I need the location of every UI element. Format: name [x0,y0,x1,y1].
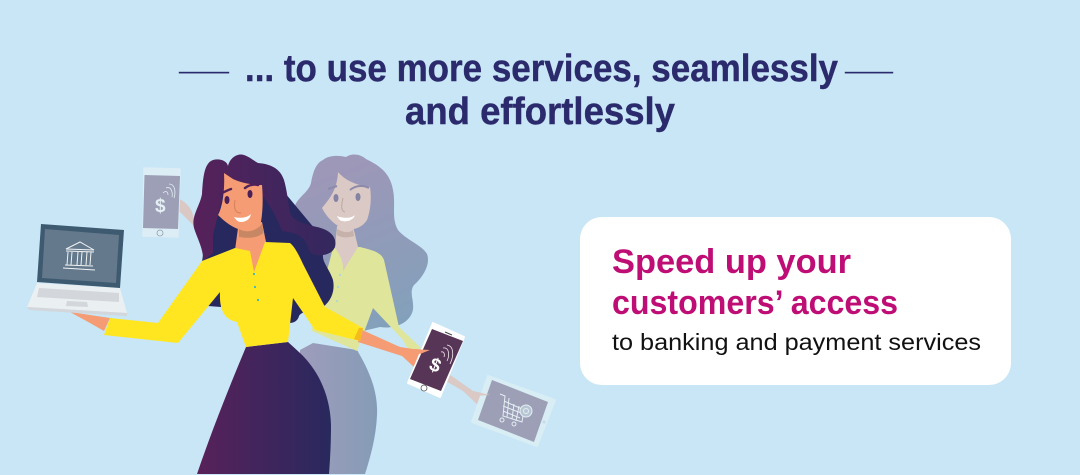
yellow blouse [104,242,363,347]
skirt [197,342,331,474]
back hair [202,175,334,323]
icon: front phone with dollar [408,323,464,397]
callout panel [580,217,1011,385]
title line one: ... to use more services, seamlessly [245,48,838,90]
title [179,48,893,133]
icon: faded phone with dollar: $ [155,196,166,217]
callout heading: customers’ access [612,284,898,322]
title line two: and effortlessly [405,91,675,133]
callout heading: Speed up your [612,243,851,281]
faded neck and face [335,226,358,272]
hand under laptop [70,312,110,331]
icon: faded phone with dollar [143,168,196,237]
faded skirt [300,343,377,474]
icon: laptop with bank [27,224,127,316]
blouse buttons [253,273,259,301]
icon: tablet with cart [472,376,555,446]
illustration: faded woman behind [294,155,555,474]
bank symbol [63,242,95,270]
faded arm [444,372,490,407]
faded hand [463,391,490,396]
front hand [358,329,430,367]
faded hand holding phone [176,198,196,228]
callout subtext: to banking and payment services [612,329,981,355]
icon: front phone with dollar: $ [426,354,444,378]
callout heading [612,243,898,322]
faded blouse [312,247,421,353]
neck [235,222,266,273]
thumb [413,349,430,354]
illustration: main woman [70,155,430,474]
faded hair [294,155,428,331]
face [218,173,263,230]
front hair [193,155,335,261]
